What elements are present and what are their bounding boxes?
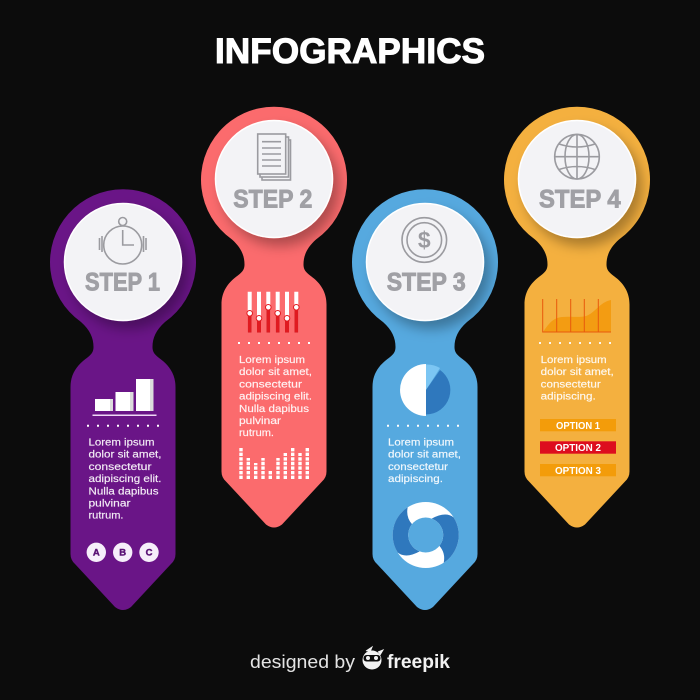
icon: dollar coin [402,218,447,262]
option 3 [540,464,616,477]
footer credit [250,647,450,673]
option badges A B C: A [93,548,100,559]
option badges A B C: C [146,548,153,559]
text block: adipiscing elit. [88,473,162,485]
text block [88,436,162,522]
step badge circle [518,120,636,238]
pie chart [400,364,450,416]
text block: pulvinar [239,415,282,427]
icon: dollar coin: $ [418,227,431,253]
panel shape [504,107,650,527]
step label: STEP 4 [539,185,621,213]
text block: rutrum. [88,510,124,522]
text block: Lorem ipsum [388,436,454,448]
text block [239,354,312,439]
option badges A B C [87,543,159,562]
option 2: OPTION 2 [555,443,601,454]
dotted divider [87,425,159,427]
step label: STEP 3 [387,268,466,296]
icon: sliders [247,292,299,333]
step badge circle [366,204,484,320]
text block: adipiscing elit. [239,391,312,403]
text block [388,436,461,485]
text block: dolor sit amet, [388,449,461,461]
panel shape [50,189,196,610]
dotted divider [387,425,459,427]
designed by text: designed by [250,652,355,672]
text block: dolor sit amet, [239,366,312,378]
panel shape [201,107,347,527]
text block: pulvinar [88,498,131,510]
text block: adipiscing. [541,391,596,403]
option 1: OPTION 1 [556,421,600,432]
panel: step 2 [201,107,347,527]
text block: Nulla dapibus [88,485,158,497]
dotted divider [539,342,611,344]
panel shape [352,189,498,610]
text block: Lorem ipsum [239,354,305,366]
text block: Lorem ipsum [541,354,607,366]
icon: bar chart [92,379,156,416]
option 1 [540,419,616,432]
panel: step 4 [504,107,650,527]
text block: consectetur [239,378,303,390]
icon: swirl ring [393,502,459,568]
text block [541,354,614,403]
text block: Nulla dapibus [239,403,309,415]
title: INFOGRAPHICS [215,32,485,71]
dotted divider [238,342,310,344]
option 3: OPTION 3 [555,466,601,477]
text block: rutrum. [239,427,274,439]
panel: step 3 [352,189,498,610]
text block: dolor sit amet, [88,449,162,461]
text block: adipiscing. [388,473,443,485]
icon: stopwatch [100,218,146,264]
text block: consectetur [88,461,152,473]
step badge circle [64,204,182,320]
icon: dot equalizer [241,448,307,479]
text block: dolor sit amet, [541,366,614,378]
text block: Lorem ipsum [88,436,155,448]
icon: globe [555,134,599,179]
text block: consectetur [541,378,601,390]
option 2 [540,441,616,454]
area chart [543,299,611,332]
icon: freepik mascot [362,647,383,670]
step badge circle [216,120,332,238]
panel: step 1 [50,189,196,610]
text block: consectetur [388,461,449,473]
step label: STEP 1 [85,268,160,296]
icon: document stack [258,134,290,180]
freepik wordmark: freepik [387,652,450,673]
step label: STEP 2 [233,185,312,213]
option badges A B C: B [119,548,126,559]
